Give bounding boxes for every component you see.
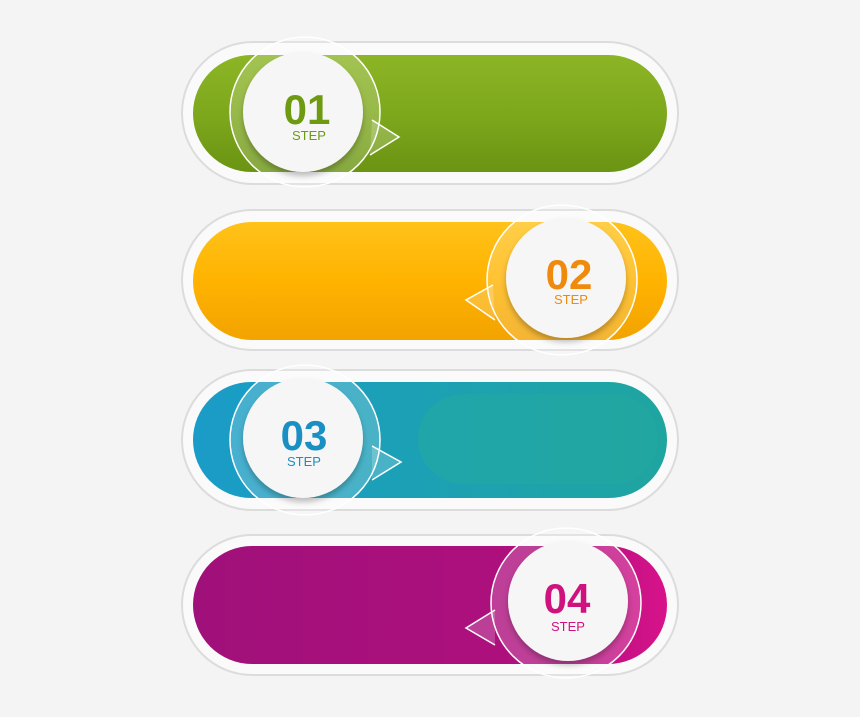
- step 3: [182, 365, 678, 515]
- step 1: [182, 37, 678, 187]
- step 1: STEP: [292, 128, 326, 143]
- step 3: STEP: [287, 454, 321, 469]
- step 4: STEP: [551, 619, 585, 634]
- label 02: 02: [546, 251, 592, 298]
- label 04: 04: [544, 575, 591, 622]
- label 03: 03: [281, 412, 327, 459]
- step 2: STEP: [554, 292, 588, 307]
- step 2: [182, 205, 678, 355]
- label 01: 01: [284, 86, 330, 133]
- step 4: [182, 528, 678, 678]
